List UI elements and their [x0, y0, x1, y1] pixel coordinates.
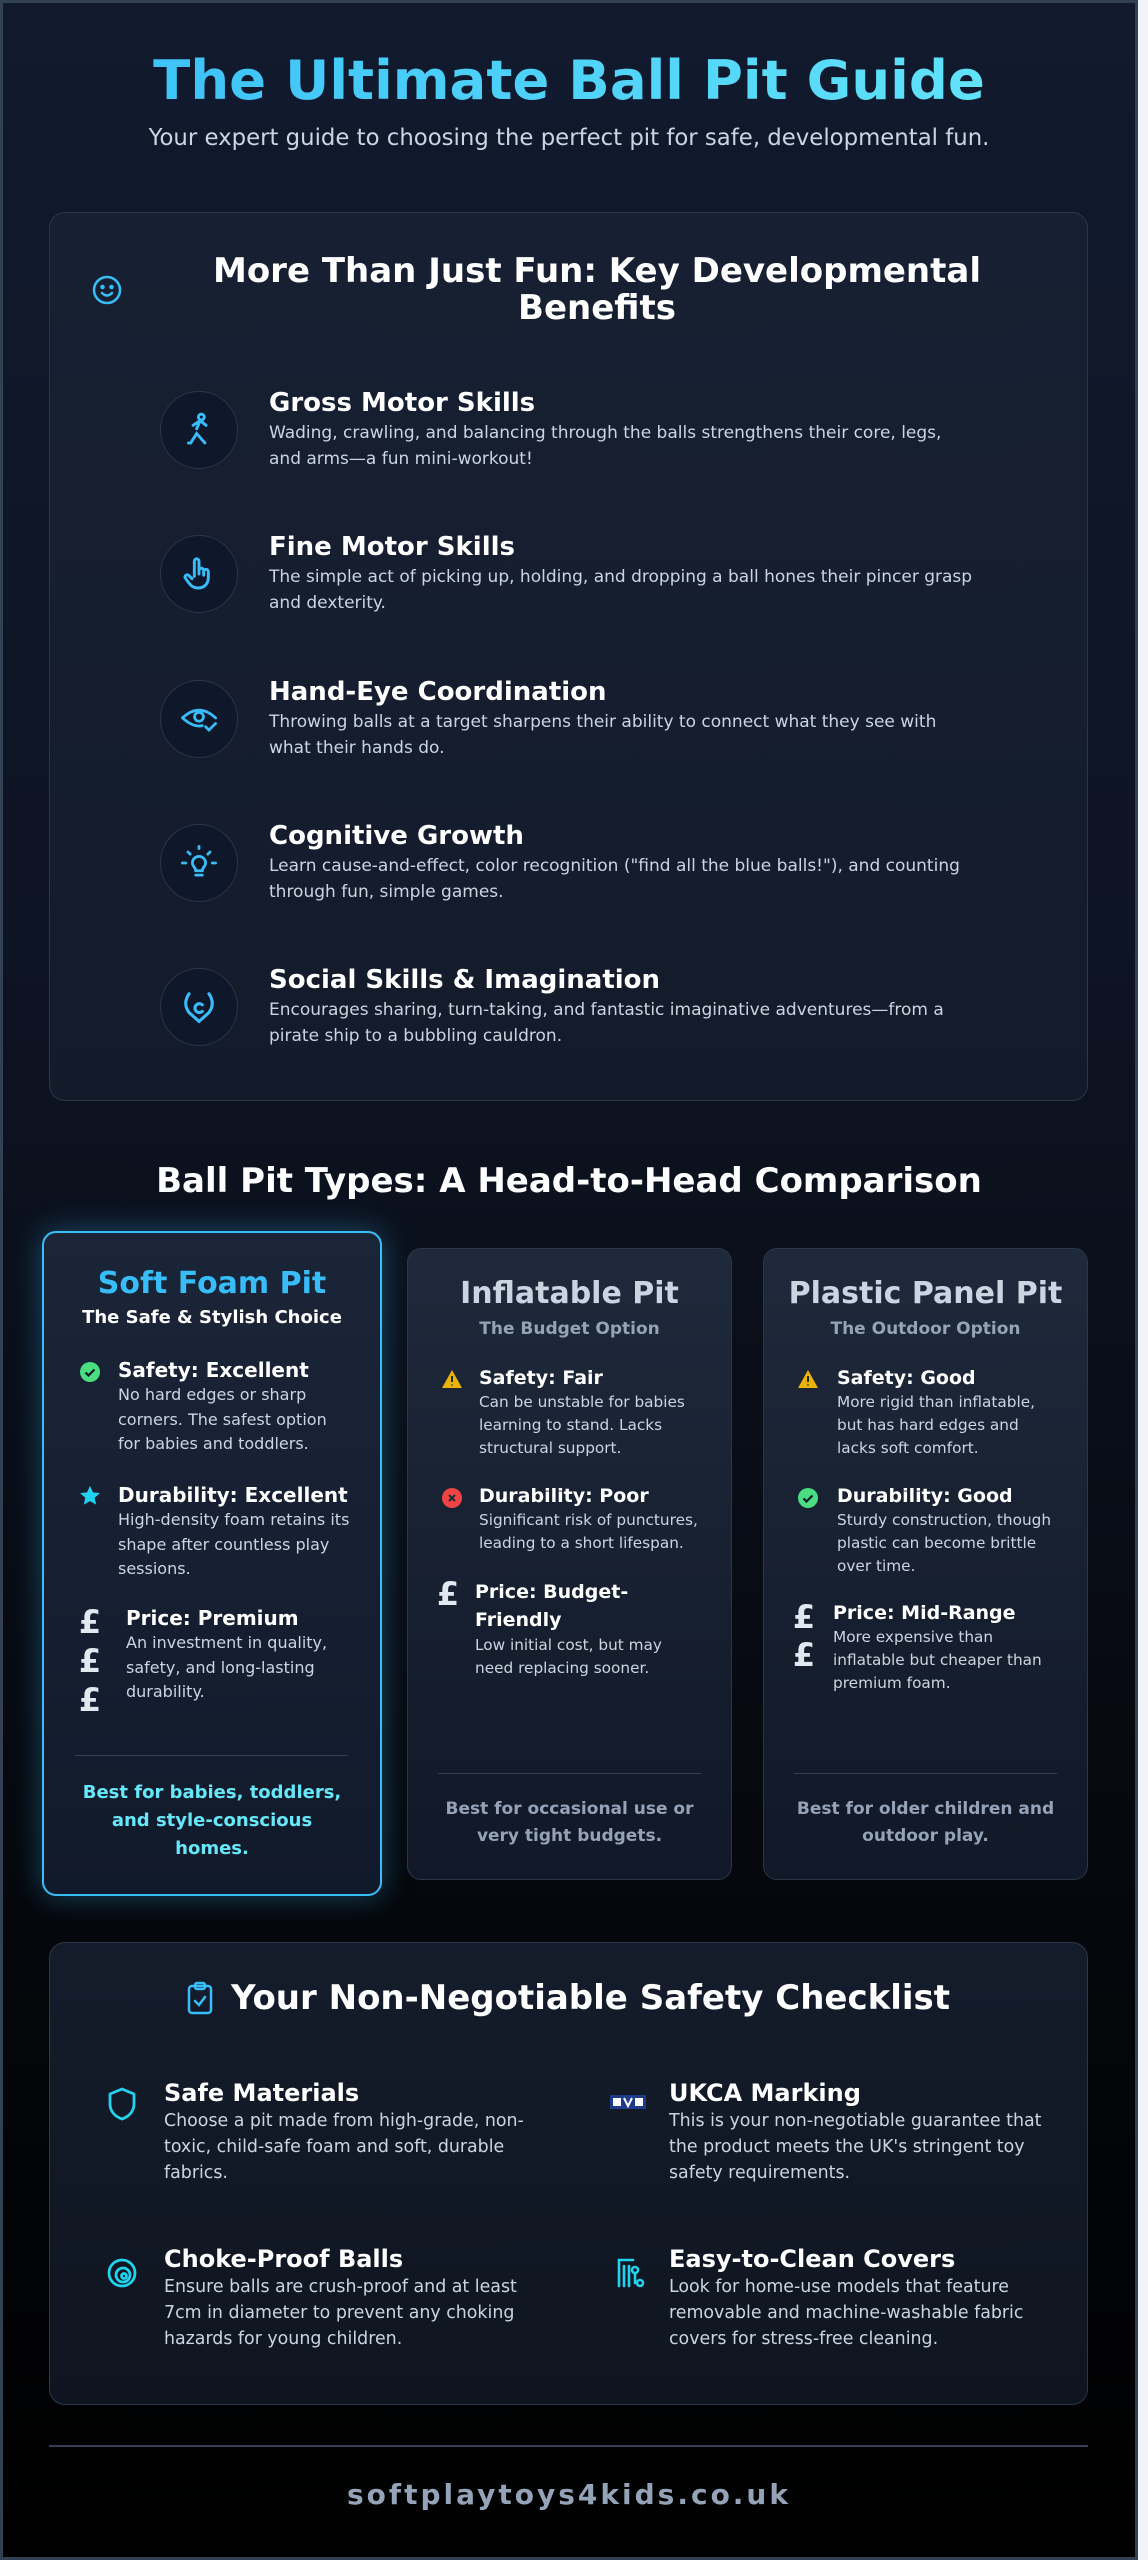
card: inflatable pit: [407, 1248, 732, 1880]
item: UKCA: [610, 2079, 1042, 2183]
heading: benefits: More Than Just Fun: Key Developmental Benefits: [213, 251, 981, 328]
text: choke-proof: Choke-Proof Balls: [164, 2245, 403, 2273]
icon: warning: [442, 1370, 462, 1388]
text: safe materials: Safe Materials: [164, 2079, 359, 2107]
row: safety: More rigid than inflatable, but has hard edges and lacks soft comfort.: [837, 1393, 1035, 1457]
icon: lightbulb: [160, 824, 238, 902]
card title: Soft Foam Pit: [98, 1266, 326, 1301]
text: social: Social Skills & Imagination: [269, 965, 660, 995]
text: choke-proof: [164, 2245, 517, 2349]
icon: UKCA mark: [610, 2095, 646, 2109]
card subtitle: The Outdoor Option: [830, 1319, 1020, 1339]
card: soft foam pit: [42, 1231, 382, 1896]
title: [3, 45, 1135, 115]
subtitle: Your expert guide to choosing the perfect pit for safe, developmental fun.: [149, 125, 989, 151]
text: gross motor: Wading, crawling, and balancing through the balls strengthens their core, legs, and arms—a fun mini-workout!: [269, 423, 941, 469]
icon: pounds: £: [79, 1642, 101, 1680]
text: hand-eye: [268, 677, 936, 758]
row: safety: Safety: Excellent: [118, 1358, 309, 1382]
row: durability: [479, 1485, 698, 1552]
icon: cross: [442, 1488, 462, 1508]
row: safety: Can be unstable for babies learning to stand. Lacks structural support.: [479, 1393, 685, 1457]
text: social: [269, 965, 944, 1046]
text: UKCA: [668, 2079, 1042, 2183]
row: durability: Durability: Poor: [479, 1485, 649, 1507]
icon: pound: £: [437, 1575, 459, 1613]
icon: check: [798, 1488, 818, 1508]
row: safety: Safety: Good: [837, 1367, 976, 1389]
row: durability: Durability: Excellent: [118, 1483, 348, 1507]
row: durability: Significant risk of punctures, leading to a short lifespan.: [479, 1511, 698, 1552]
text: safe materials: Choose a pit made from high-grade, non-toxic, child-safe foam and soft, durable fabrics.: [164, 2111, 524, 2183]
benefit: social: [160, 965, 944, 1046]
icon: heart hands: [160, 968, 238, 1046]
icon: eye check: [160, 680, 238, 758]
text: fine motor: [268, 532, 972, 613]
card footer: Best for older children and outdoor play.: [797, 1799, 1054, 1846]
benefit: hand-eye: [160, 677, 936, 758]
card footer: Best for babies, toddlers, and style-conscious homes.: [83, 1782, 341, 1859]
item: safe materials: [108, 2079, 524, 2183]
text: gross motor: Gross Motor Skills: [269, 388, 535, 418]
icon: ball: [108, 2258, 136, 2288]
row: price: Low initial cost, but may need replacing sooner.: [475, 1636, 662, 1677]
icon: pounds: [79, 1603, 101, 1719]
panel: developmental benefits: [49, 212, 1088, 1101]
panel: safety checklist: [49, 1942, 1088, 2405]
icon: pounds: £: [79, 1603, 101, 1641]
text: fine motor: Fine Motor Skills: [269, 532, 515, 562]
card footer: Best for occasional use or very tight budgets.: [445, 1799, 694, 1846]
row: durability: Sturdy construction, though plastic can become brittle over time.: [837, 1511, 1051, 1575]
row: price: An investment in quality, safety, and long-lasting durability.: [126, 1633, 327, 1701]
text: easy-clean: Look for home-use models that feature removable and machine-washable fabric covers for stress-free cleaning.: [669, 2277, 1023, 2349]
icon: smiley: [92, 276, 122, 304]
row: safety: No hard edges or sharp corners. The safest option for babies and toddlers.: [118, 1385, 327, 1453]
row: price: [475, 1581, 662, 1677]
text: cognitive: Cognitive Growth: [269, 821, 524, 851]
row: durability: Durability: Good: [837, 1485, 1013, 1507]
row: price: More expensive than inflatable but cheaper than premium foam.: [833, 1628, 1042, 1692]
icon: running figure: [160, 391, 238, 469]
row: price: Price: Mid-Range: [833, 1602, 1016, 1624]
icon: warning: [798, 1370, 818, 1388]
text: cognitive: [269, 821, 960, 902]
heading: comparison: Ball Pit Types: A Head-to-Head Comparison: [156, 1161, 982, 1201]
row: price: Price: Premium: [126, 1606, 299, 1630]
text: easy-clean: Easy-to-Clean Covers: [669, 2245, 955, 2273]
item: choke-proof: [108, 2245, 517, 2349]
benefit: cognitive: [160, 821, 960, 902]
text: UKCA: UKCA Marking: [669, 2079, 861, 2107]
text: social: Encourages sharing, turn-taking, and fantastic imaginative adventures—from a pirate ship to a bubbling cauldron.: [269, 1000, 944, 1046]
icon: shield: [108, 2088, 136, 2120]
row: price: Price: Budget-Friendly: [475, 1581, 628, 1631]
text: UKCA: This is your non-negotiable guarantee that the product meets the UK's stringent toy safety requirements.: [669, 2111, 1042, 2183]
card: plastic panel pit: [763, 1248, 1088, 1880]
title: The Ultimate Ball Pit Guide: [153, 48, 985, 112]
icon: star: [80, 1486, 100, 1505]
footer: website: softplaytoys4kids.co.uk: [347, 2478, 791, 2511]
row: safety: Safety: Fair: [479, 1367, 603, 1389]
benefit: fine motor: [160, 532, 972, 613]
card title: Inflatable Pit: [460, 1276, 679, 1311]
icon: pounds: £: [793, 1598, 815, 1636]
text: easy-clean: [669, 2244, 1054, 2352]
text: safe materials: [164, 2079, 524, 2183]
card subtitle: The Budget Option: [479, 1319, 660, 1339]
icon: hand: [160, 535, 238, 613]
card subtitle: The Safe & Stylish Choice: [82, 1307, 342, 1328]
text: choke-proof: Ensure balls are crush-proof and at least 7cm in diameter to prevent any choking hazards for young children.: [164, 2277, 517, 2349]
text: hand-eye: Hand-Eye Coordination: [269, 677, 607, 707]
icon: pounds: £: [793, 1636, 815, 1674]
icon: clipboard: [188, 1982, 212, 2014]
icon: check: [80, 1362, 100, 1382]
text: cognitive: Learn cause-and-effect, color recognition ("find all the blue balls!"), and counting through fun, simple games.: [269, 856, 960, 902]
row: durability: High-density foam retains its shape after countless play sessions.: [118, 1510, 349, 1578]
text: fine motor: The simple act of picking up, holding, and dropping a ball hones their pincer grasp and dexterity.: [269, 567, 972, 613]
icon: pounds: [793, 1598, 815, 1674]
heading: checklist: Your Non-Negotiable Safety Checklist: [231, 1978, 950, 2018]
benefit: gross motor: [160, 388, 941, 469]
text: hand-eye: Throwing balls at a target sharpens their ability to connect what they see with what their hands do.: [269, 712, 936, 758]
item: easy-clean: [618, 2245, 1023, 2349]
icon: pounds: £: [79, 1681, 101, 1719]
text: gross motor: [269, 388, 941, 469]
icon: washing: [616, 2256, 646, 2290]
card title: Plastic Panel Pit: [789, 1276, 1062, 1311]
